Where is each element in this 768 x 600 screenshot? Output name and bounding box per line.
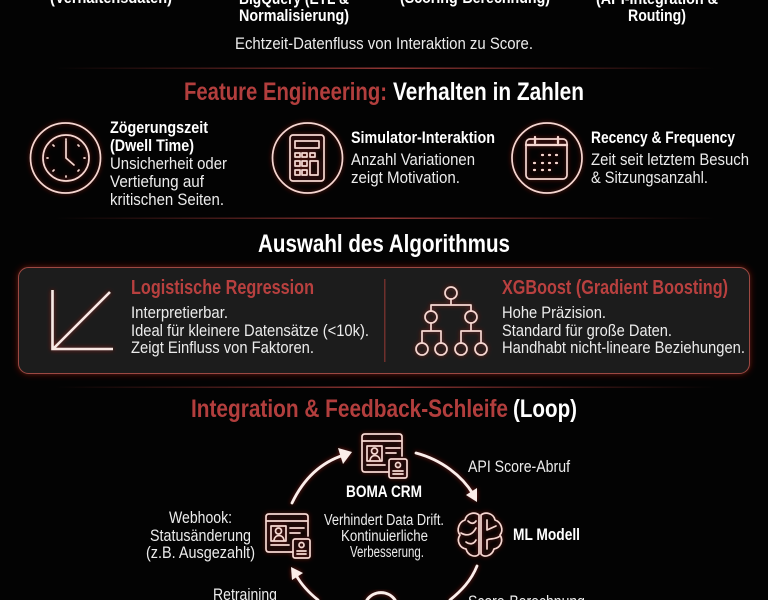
text: recency: Zeit seit letztem Besuch [591, 150, 749, 169]
icon: bottom node [367, 593, 395, 600]
heading: integration loop: (Loop) [513, 395, 577, 423]
pipeline step labels: Normalisierung) [239, 7, 349, 25]
heading: algorithm selection: Auswahl des Algorithmus [258, 230, 510, 258]
arrow: retraining to webhook [291, 567, 318, 600]
pipeline step labels: Routing) [628, 7, 686, 25]
label: BOMA CRM: BOMA CRM [346, 483, 422, 501]
text: dwell time: Zögerungszeit [110, 119, 208, 137]
label: webhook: Statusänderung [150, 526, 251, 545]
text: logistic regression: Logistische Regression [131, 276, 314, 299]
icon: regression chart [52, 290, 113, 349]
heading: integration loop: Integration & Feedback-Schleife [191, 395, 508, 423]
label: webhook [146, 508, 255, 562]
text: loop centre [324, 512, 444, 561]
text: recency [591, 129, 749, 187]
text: logistic regression [131, 276, 369, 357]
icon: decision tree [416, 287, 487, 355]
text: loop centre: Verhindert Data Drift. [324, 512, 444, 529]
arrow: CRM to model [416, 453, 477, 502]
text: recency: Recency & Frequency [591, 129, 736, 147]
icon: clock [30, 123, 100, 193]
label: webhook: (z.B. Ausgezahlt) [146, 543, 255, 562]
text: simulator: zeigt Motivation. [351, 168, 460, 187]
text: loop centre: Verbesserung. [350, 544, 424, 561]
icon: webhook window [266, 514, 310, 558]
text: logistic regression: Interpretierbar. [131, 303, 228, 322]
text: xgboost: Hohe Präzision. [502, 303, 606, 322]
heading: feature engineering [184, 78, 584, 106]
text: simulator [351, 129, 495, 187]
feature: recency and frequency [512, 123, 749, 193]
arrow: webhook to CRM [292, 448, 352, 503]
text: dwell time: Unsicherheit oder [110, 154, 227, 173]
icon: BOMA CRM [362, 434, 407, 478]
text: logistic regression: Ideal für kleinere Datensätze (<10k). [131, 321, 369, 340]
feature: dwell time [30, 119, 227, 209]
text: loop centre: Kontinuierliche [341, 528, 428, 545]
text: xgboost: Standard für große Daten. [502, 321, 672, 340]
text: dwell time: Vertiefung auf [110, 172, 204, 191]
text: dwell time: (Dwell Time) [110, 137, 194, 155]
label: API score: API Score-Abruf [468, 457, 570, 476]
text: simulator: Anzahl Variationen [351, 150, 475, 169]
label: ML model: ML Modell [513, 526, 580, 544]
feature: simulator [272, 123, 495, 193]
pipeline caption: Echtzeit-Datenfluss von Interaktion zu Score. [235, 34, 533, 53]
label: webhook: Webhook: [169, 508, 232, 527]
text: xgboost [502, 276, 745, 357]
heading: feature engineering: Verhalten in Zahlen [393, 78, 584, 106]
loop diagram [146, 434, 585, 600]
text: logistic regression: Zeigt Einfluss von Faktoren. [131, 338, 314, 357]
text: dwell time: kritischen Seiten. [110, 190, 224, 209]
icon: brain [458, 513, 502, 556]
text: simulator: Simulator-Interaktion [351, 129, 495, 147]
heading: feature engineering: Feature Engineering: [184, 78, 387, 106]
panel: algorithms [18, 268, 750, 374]
icon: calculator [272, 123, 342, 193]
text: dwell time [110, 119, 227, 209]
arrow: model to score [450, 566, 477, 600]
icon: calendar [512, 123, 582, 193]
text: recency: & Sitzungsanzahl. [591, 168, 708, 187]
pipeline step labels [50, 0, 718, 25]
